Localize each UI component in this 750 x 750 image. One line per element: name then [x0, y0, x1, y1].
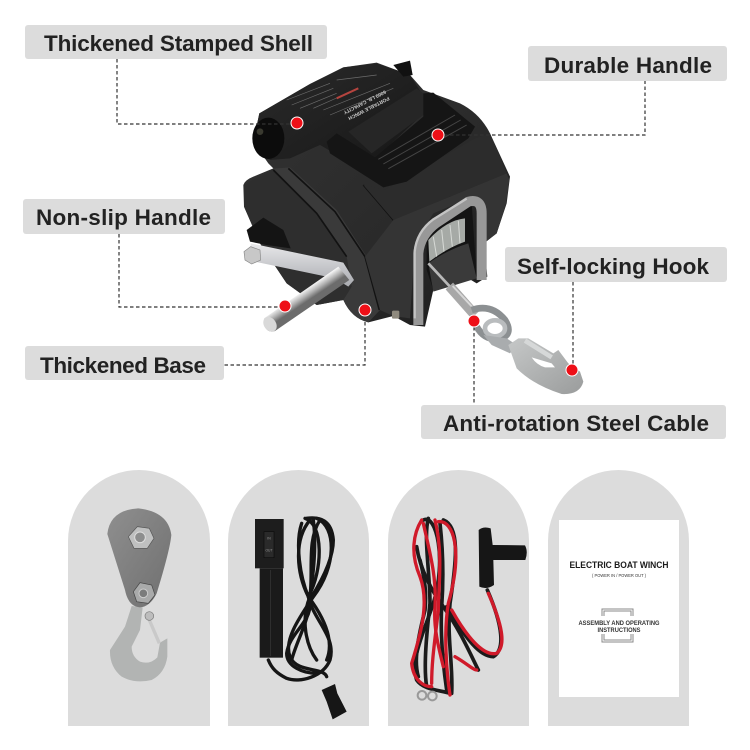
panel: power cables: [388, 470, 529, 726]
main product: winch: [243, 61, 510, 334]
front face highlight: [365, 173, 509, 318]
manual frame: [602, 609, 633, 642]
side cover: [244, 170, 352, 305]
shoulder band under handle: [363, 133, 507, 220]
label box: [528, 46, 727, 81]
pulley cheek plate: [107, 508, 171, 607]
label box: [25, 25, 327, 59]
side cover rim: [273, 167, 380, 322]
red marker: [468, 315, 480, 327]
lower drum plate: [428, 243, 477, 292]
black clutch knob: [247, 218, 291, 248]
rocker switch: [264, 532, 274, 558]
wound steel cable: [428, 218, 465, 262]
leader line: [473, 321, 475, 405]
accessory drawing: [412, 518, 527, 700]
housing ribs: [273, 168, 450, 310]
arch background: [388, 470, 529, 726]
sleeve highlight: [453, 286, 477, 312]
red marker: [432, 129, 444, 141]
latch rivet: [145, 612, 154, 620]
label line two: 6000 LB. CAPACITY: [342, 88, 387, 115]
remote handle: [260, 568, 283, 658]
callout: Non-slip Handle: [23, 199, 291, 312]
cable drum recess: [427, 203, 477, 290]
red marker: [291, 117, 303, 129]
top knob: [393, 61, 413, 77]
hook body: [508, 338, 583, 394]
plug connector: [322, 684, 347, 719]
crank pin end cap: [260, 314, 280, 334]
hook latch: [149, 620, 159, 643]
manual subtitle: ( POWER IN / POWER OUT ): [592, 573, 647, 578]
upper bolt centre: [135, 532, 145, 543]
ring terminals: [418, 691, 437, 700]
label box: [23, 199, 225, 234]
U bolt fairlead: [418, 201, 482, 325]
cable leaving drum: [428, 263, 450, 287]
label text: Durable Handle: [544, 53, 712, 78]
hook latch: [525, 341, 552, 357]
callout: Anti-rotation Steel Cable: [421, 315, 726, 439]
handle hinge roll: [348, 88, 430, 153]
black wires: [415, 518, 501, 693]
accessory drawing: [107, 508, 171, 681]
label box: [25, 346, 224, 380]
crank bolt: [244, 247, 261, 264]
label box: [505, 247, 727, 282]
panel: instruction manual: [548, 470, 689, 726]
manual title: ELECTRIC BOAT WINCH: [570, 560, 668, 570]
lower bolt: [133, 583, 155, 603]
T connector: [479, 527, 527, 588]
hook assembly: [449, 286, 583, 394]
round motor cap: [252, 118, 284, 159]
motor cap centre: [257, 128, 263, 135]
crank arm: [250, 243, 354, 287]
upper bolt: [128, 527, 154, 548]
coiled cable: [268, 518, 333, 680]
panel: pulley block and hook: [68, 470, 210, 726]
leader line: [438, 81, 645, 135]
fairlead highlight: [415, 199, 467, 318]
callout: Thickened Stamped Shell: [25, 25, 327, 129]
panel: wired remote control: [228, 470, 369, 726]
remote handle highlight: [270, 570, 271, 656]
lower bolt centre: [139, 589, 148, 598]
label lines on top: [287, 75, 393, 115]
red marker: [279, 300, 291, 312]
carry handle outer: [327, 93, 475, 187]
leader line: [119, 234, 285, 307]
cable eye loop: [472, 308, 508, 339]
label box: [421, 405, 726, 439]
crank handle pin: [264, 267, 349, 332]
callout: Durable Handle: [432, 46, 727, 141]
switch label in: IN: [267, 536, 271, 540]
leader line: [572, 282, 574, 370]
label text: Anti-rotation Steel Cable: [443, 411, 709, 436]
red mark on label: [337, 88, 358, 98]
handle grip ridges: [378, 115, 467, 169]
arch background: [548, 470, 689, 726]
lower bolt nut: [133, 583, 155, 603]
manual heading line two: INSTRUCTIONS: [598, 627, 640, 634]
leader line: [117, 59, 297, 124]
arch background: [228, 470, 369, 726]
remote head: [255, 519, 284, 568]
winch product label text: [342, 88, 390, 122]
winch housing silhouette: [243, 63, 510, 327]
ring terminal two: [428, 692, 437, 700]
callout: Thickened Base: [25, 304, 371, 380]
leader line: [224, 310, 365, 365]
ring terminal one: [418, 691, 426, 700]
red marker: [359, 304, 371, 316]
hook throat: [532, 357, 555, 367]
label text: Self-locking Hook: [517, 254, 709, 279]
arch background: [68, 470, 210, 726]
swivel shank: [483, 335, 517, 353]
top motor cover: [253, 63, 422, 170]
base bolt: [392, 311, 399, 319]
red marker: [566, 364, 578, 376]
label text: Thickened Stamped Shell: [44, 31, 313, 56]
swivel eye: [485, 320, 505, 336]
hook body: [110, 606, 167, 681]
manual page: [559, 520, 679, 697]
label text: Thickened Base: [40, 353, 206, 378]
cable lay lines: [433, 221, 460, 257]
switch label out: OUT: [265, 549, 273, 553]
red wires: [412, 520, 502, 695]
accessory drawing: [255, 518, 347, 719]
callout: Self-locking Hook: [505, 247, 727, 376]
label line one: PORTABLE WINCH: [347, 95, 390, 121]
label text: Non-slip Handle: [36, 205, 211, 230]
upper bolt nut: [128, 527, 154, 548]
cable sleeve: [449, 286, 475, 315]
manual heading line one: ASSEMBLY AND OPERATING: [578, 620, 660, 627]
